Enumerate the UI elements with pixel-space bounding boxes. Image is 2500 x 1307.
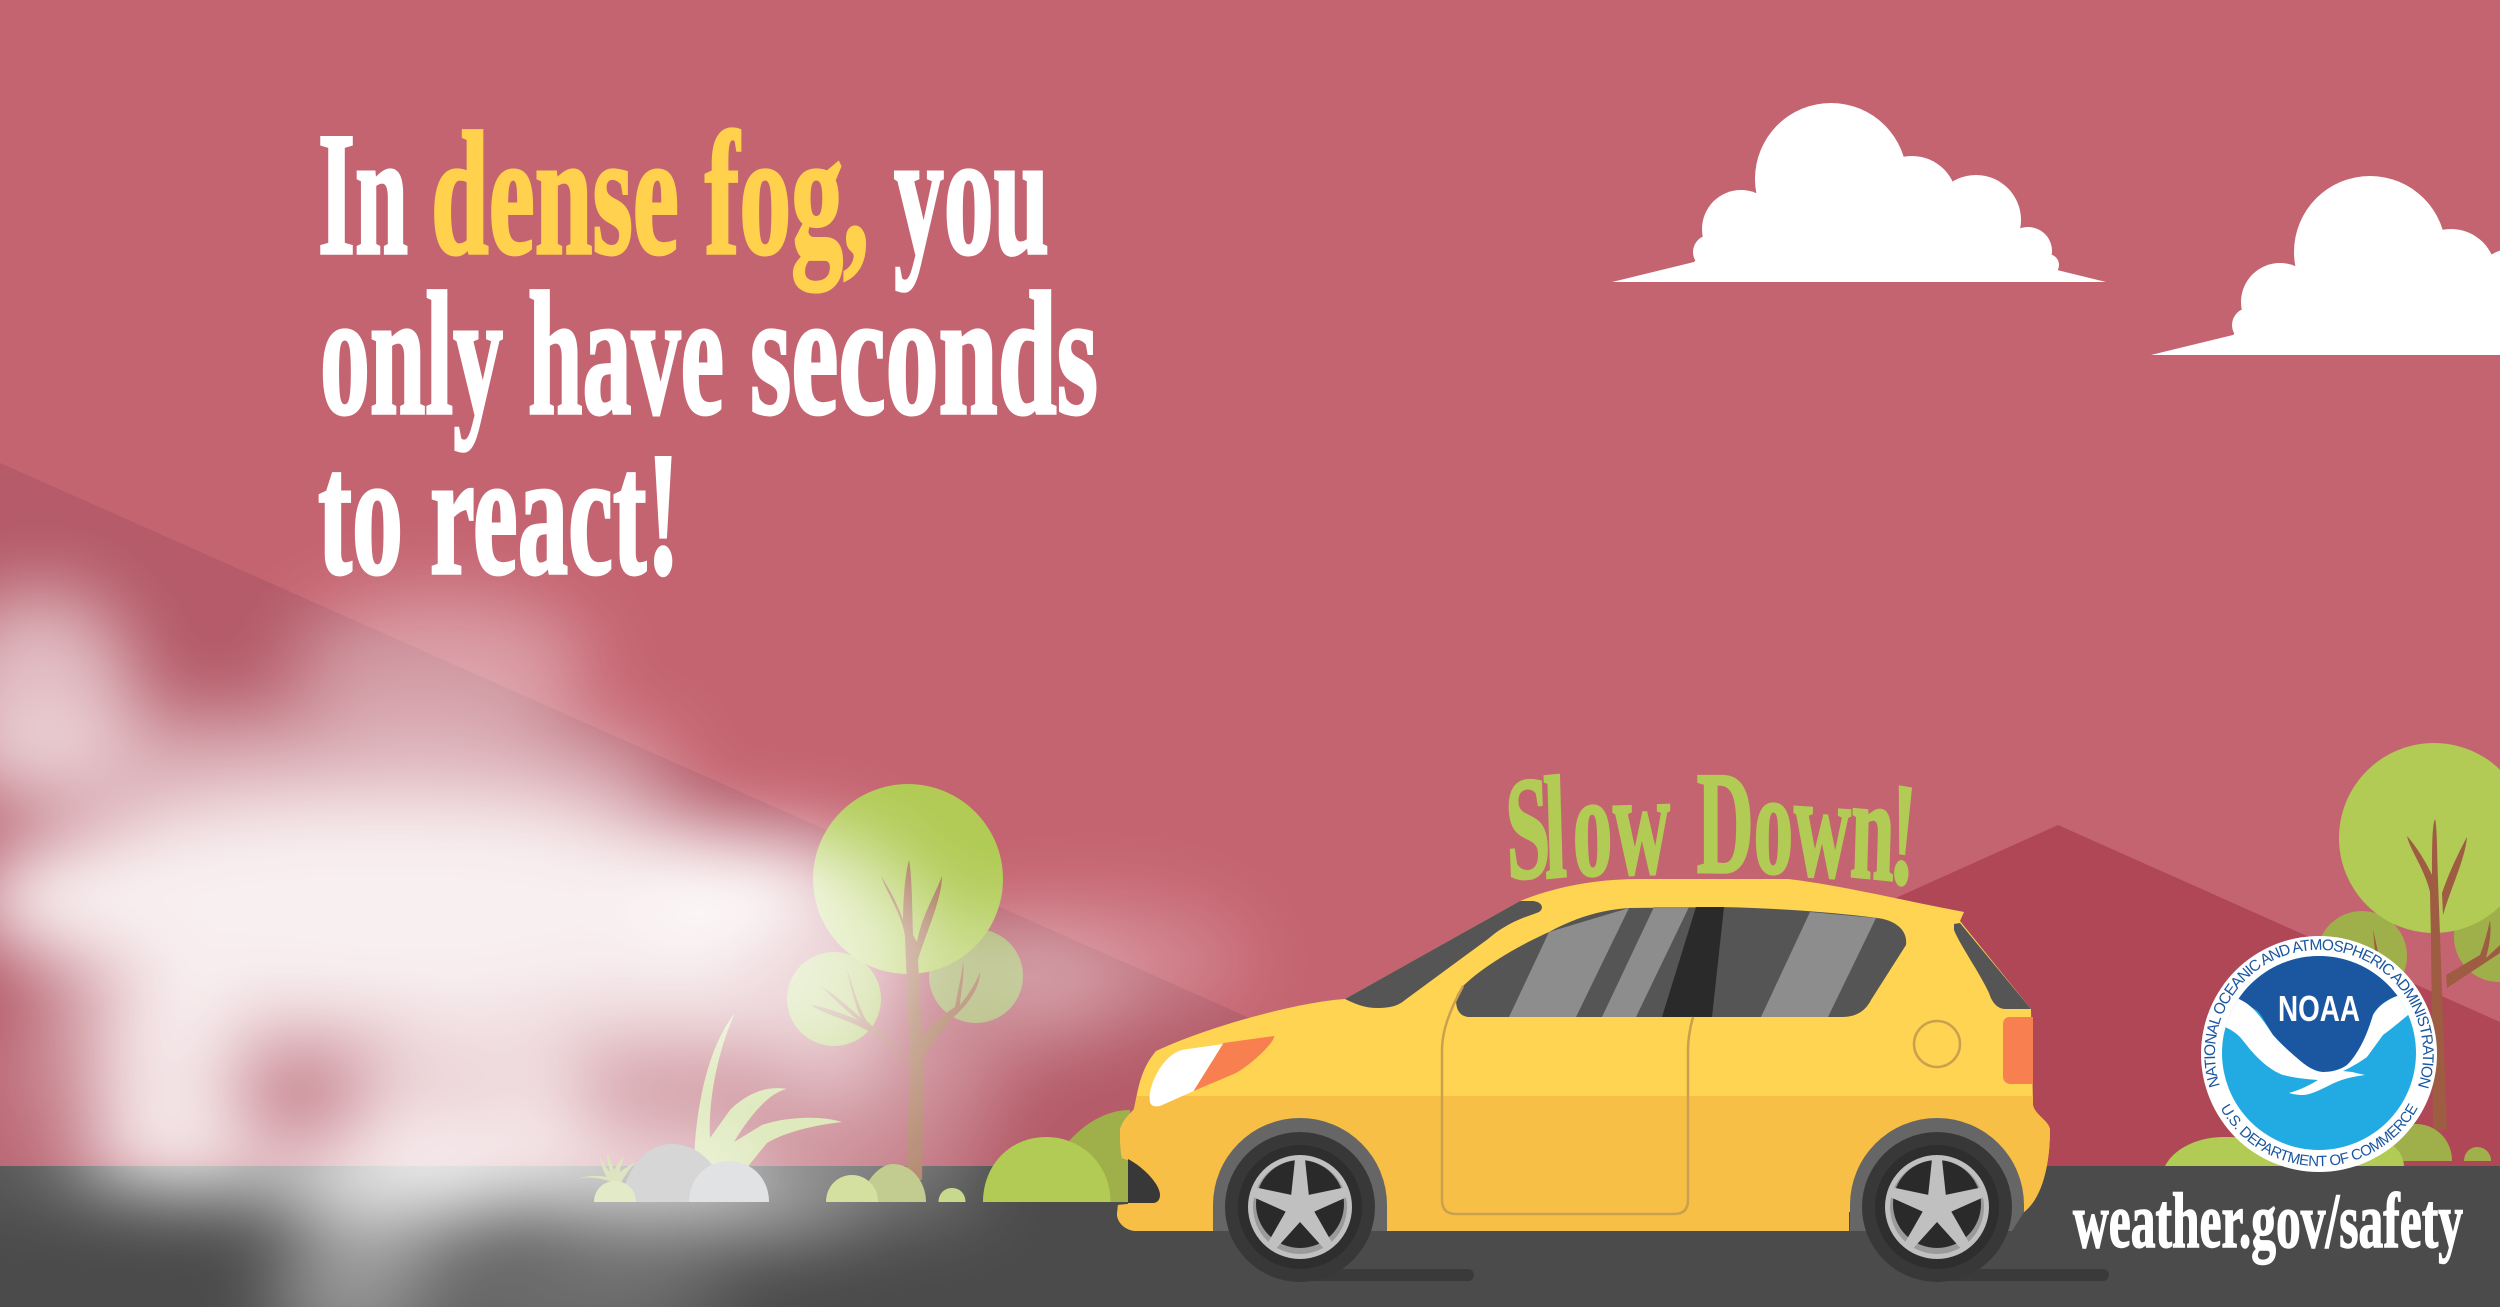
headlight orange [1194, 1036, 1274, 1091]
rear wheel [1850, 1118, 2024, 1282]
headlight white [1150, 1044, 1224, 1106]
side window [1456, 907, 1906, 1017]
door outline [1442, 986, 1693, 1214]
car body upper [1117, 879, 2050, 1231]
tiny bush [938, 1188, 966, 1202]
NOAA logo [2201, 936, 2437, 1172]
heading [318, 97, 1098, 612]
tire shadows [1300, 1269, 2109, 1281]
rear window [1954, 923, 2031, 1009]
logo ring text top: NATIONAL OCEANIC AND ATMOSPHERIC ADMINISTRATION [2204, 939, 2434, 1088]
logo wordmark: NOAA [2278, 988, 2360, 1029]
logo gull [2226, 996, 2408, 1095]
heading: react! [430, 417, 680, 612]
cloud: left [1612, 103, 2106, 282]
heading: you [894, 97, 1049, 292]
car body lower band [1117, 1096, 2050, 1231]
front bumper notch [1128, 1159, 1160, 1203]
small grass tuft [577, 1153, 636, 1184]
heading: have [528, 257, 724, 452]
logo ring text bottom: U.S. DEPARTMENT OF COMMERCE [2222, 1103, 2418, 1166]
bush front [826, 1175, 878, 1202]
fuel cap [1914, 1021, 1960, 1067]
logo sea [2222, 956, 2416, 1150]
heading: to [318, 417, 403, 612]
right bushes [2165, 1124, 2491, 1166]
tail light [2003, 1017, 2033, 1084]
heading: dense fog, [431, 97, 869, 292]
fogged rocks and plants [577, 1144, 966, 1202]
fogged tree [787, 784, 1023, 1180]
bush back [860, 1164, 926, 1202]
heading: In [318, 97, 408, 292]
logo disc [2201, 936, 2437, 1172]
front wheel [1213, 1118, 1387, 1282]
slow down label: Slow Down! [1503, 743, 1920, 917]
large rock [621, 1144, 720, 1202]
road [0, 1166, 2500, 1307]
small rock [689, 1161, 769, 1202]
heading: seconds [750, 257, 1098, 452]
mountain: left [0, 463, 1583, 1166]
windshield [1345, 901, 1542, 1008]
logo sky [2238, 956, 2398, 1072]
grass blades [694, 1013, 842, 1170]
fog cloud [0, 590, 1250, 1307]
heading: only [320, 257, 503, 452]
window glare stripes [1509, 907, 1876, 1017]
mountain: right [1500, 825, 2500, 1166]
right tree [2317, 743, 2500, 1130]
car [1117, 879, 2050, 1282]
cloud: right [2151, 176, 2500, 355]
bushes by the car [983, 1110, 1130, 1202]
pale bush [594, 1181, 636, 1202]
